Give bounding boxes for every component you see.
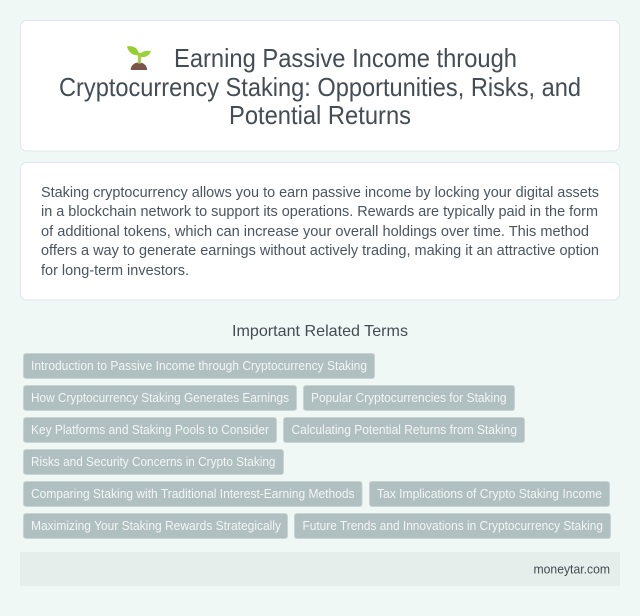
tag: tax implications: Tax Implications of Crypto Staking Income <box>377 487 602 501</box>
footer <box>20 552 620 586</box>
tag: future trends: Future Trends and Innovations in Cryptocurrency Staking <box>302 519 603 533</box>
tag: key platforms <box>24 418 276 442</box>
icon: seedling <box>127 46 151 70</box>
title text <box>59 45 581 130</box>
title text: Cryptocurrency Staking: Opportunities, Risks, and <box>59 74 581 102</box>
description text: offers a way to generate earnings without actively trading, making it an attractive option <box>41 243 599 259</box>
tag: popular cryptocurrencies <box>304 386 514 410</box>
heading: important related terms: Important Related Terms <box>232 323 408 340</box>
tag: key platforms: Key Platforms and Staking Pools to Consider <box>31 423 269 437</box>
tag: introduction: Introduction to Passive Income through Cryptocurrency Staking <box>31 359 367 373</box>
tag: maximizing rewards: Maximizing Your Staking Rewards Strategically <box>31 519 282 533</box>
description text: in a blockchain network to support its operations. Rewards are typically paid in the form <box>41 204 598 220</box>
description text <box>41 185 599 279</box>
description text: of additional tokens, which can increase your overall holdings over time. This method <box>41 224 589 240</box>
tag: calculating returns: Calculating Potential Returns from Staking <box>292 423 517 437</box>
tag: calculating returns <box>284 418 524 442</box>
title text: Earning Passive Income through <box>174 45 517 73</box>
tag: popular cryptocurrencies: Popular Cryptocurrencies for Staking <box>311 391 507 405</box>
tag: tax implications <box>370 482 610 506</box>
tag: risks <box>24 450 284 474</box>
tag: comparing <box>24 482 362 506</box>
description text: for long-term investors. <box>41 263 189 279</box>
panel: title card <box>20 20 620 151</box>
panel: description card <box>20 162 620 300</box>
description text: Staking cryptocurrency allows you to earn passive income by locking your digital assets <box>41 185 599 201</box>
tag: risks: Risks and Security Concerns in Crypto Staking <box>31 455 276 469</box>
tag: maximizing rewards <box>24 514 288 538</box>
footer source text: moneytar.com <box>534 562 610 576</box>
tag: future trends <box>294 514 610 538</box>
tag: introduction <box>24 354 374 378</box>
tag list <box>24 354 610 538</box>
tag: how staking generates earnings <box>24 386 296 410</box>
title text: Potential Returns <box>229 102 411 130</box>
tag: how staking generates earnings: How Cryptocurrency Staking Generates Earnings <box>31 391 289 405</box>
tag: comparing: Comparing Staking with Traditional Interest-Earning Methods <box>31 487 354 501</box>
